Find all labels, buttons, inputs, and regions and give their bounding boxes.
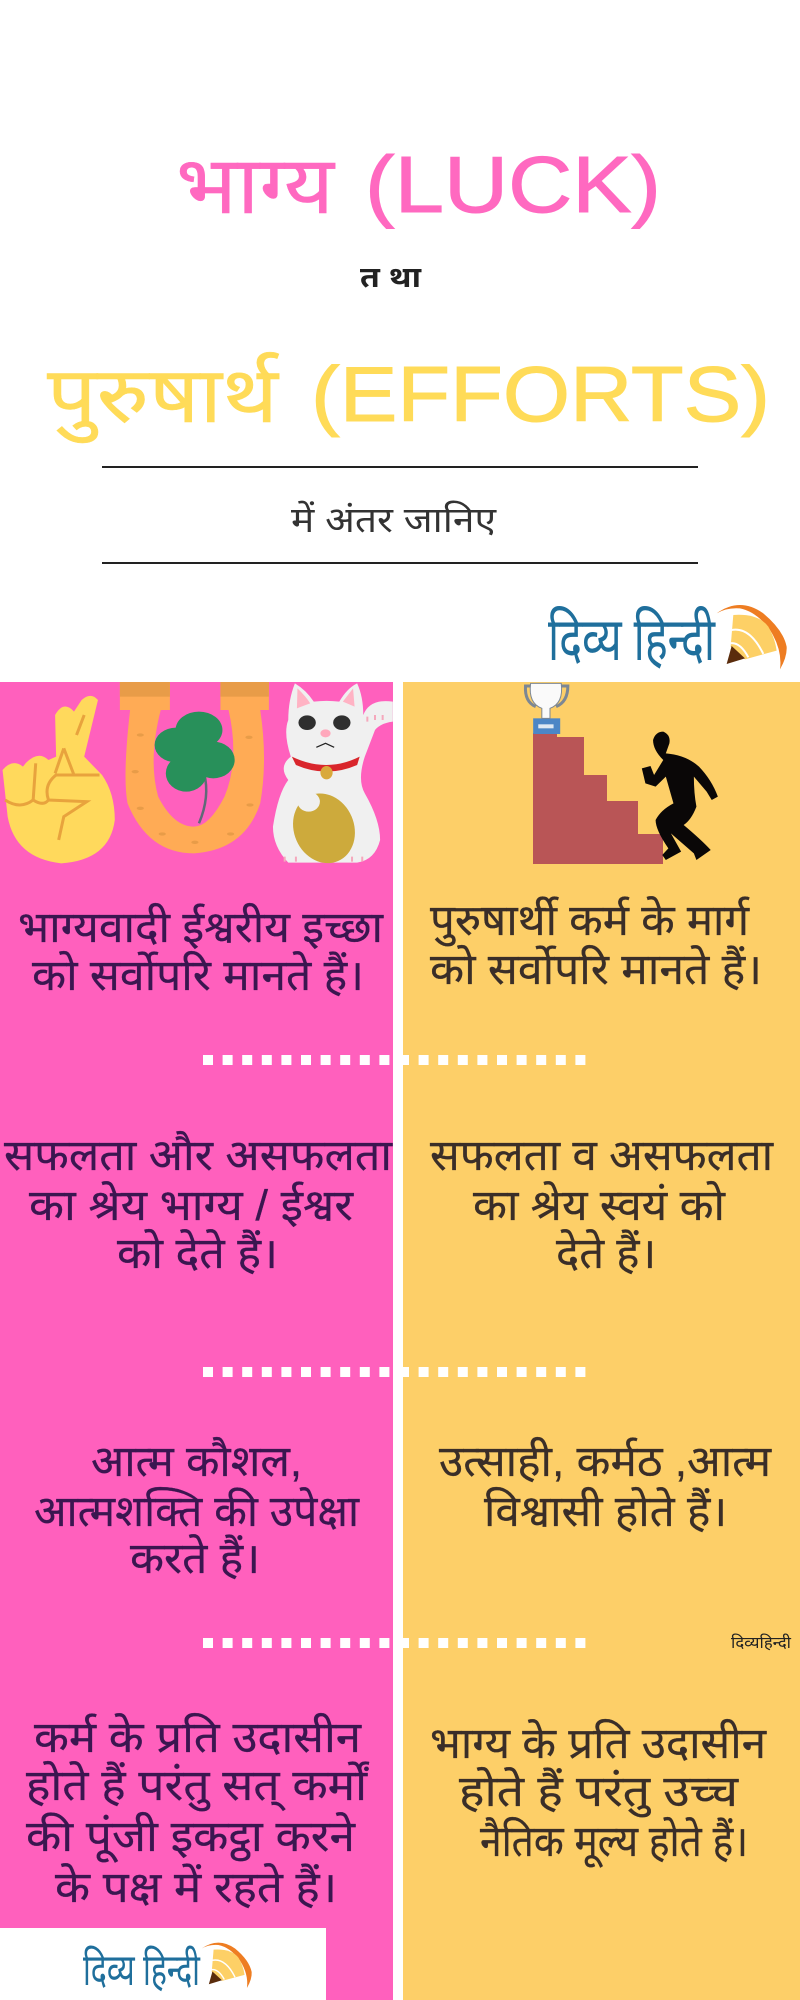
- text: left column: आत्म कौशल,: [91, 1437, 302, 1486]
- icon: crossed fingers: [3, 696, 115, 863]
- text: right column: पुरुषार्थी कर्म के मार्ग: [430, 895, 750, 947]
- panel: efforts: [403, 682, 800, 2000]
- text: right column: देते हैं।: [556, 1228, 656, 1278]
- text: left column: भाग्यवादी ईश्वरीय इच्छा: [18, 903, 384, 952]
- text: right column: [430, 895, 774, 1868]
- panel: luck: [0, 682, 393, 2000]
- text: left column: कर्म के प्रति उदासीन: [34, 1712, 362, 1762]
- title: efforts: (EFFORTS): [311, 350, 770, 438]
- text: left column: का श्रेय भाग्य / ईश्वर: [29, 1180, 354, 1230]
- icon: trophy: [525, 683, 568, 734]
- text: left column: के पक्ष में रहते हैं।: [55, 1862, 337, 1912]
- title: luck: भाग्य: [176, 141, 336, 230]
- text: right column: विश्वासी होते हैं।: [484, 1486, 727, 1536]
- title: luck: (LUCK): [365, 140, 661, 229]
- conjunction text: त था: [360, 262, 422, 294]
- text: right column: उत्साही, कर्मठ ,आत्म: [439, 1437, 772, 1486]
- title: efforts: [47, 350, 770, 443]
- icon: four leaf clover: [155, 712, 235, 823]
- title: efforts: पुरुषार्थ: [47, 351, 279, 443]
- subtitle with rules: में अंतर जानिए: [291, 500, 497, 540]
- logo: bottom: दिव्य हिन्दी: [83, 1945, 201, 1995]
- icon: staircase: [533, 733, 663, 864]
- text: right column: होते हैं परंतु उच्च: [459, 1766, 739, 1818]
- text: right column: सफलता व असफलता: [430, 1132, 774, 1180]
- small watermark text: दिव्यहिन्दी: [731, 1634, 792, 1652]
- text: left column: होते हैं परंतु सत् कर्मों: [26, 1760, 370, 1812]
- text: left column: को सर्वोपरि मानते हैं।: [32, 950, 364, 1000]
- text: left column: करते हैं।: [130, 1533, 260, 1583]
- logo: bottom: [0, 1928, 326, 2000]
- text: left column: आत्मशक्ति की उपेक्षा: [34, 1486, 360, 1536]
- icon: running man silhouette: [642, 732, 718, 860]
- text: left column: को देते हैं।: [117, 1228, 278, 1278]
- text: right column: भाग्य के प्रति उदासीन: [430, 1718, 767, 1768]
- text: right column: को सर्वोपरि मानते हैं।: [430, 944, 762, 994]
- text: left column: की पूंजी इकट्ठा करने: [26, 1811, 356, 1863]
- dotted dividers: [203, 1060, 587, 1643]
- logo: top: दिव्य हिन्दी: [548, 606, 716, 673]
- text: left column: [4, 903, 393, 1912]
- title: luck: [176, 140, 661, 230]
- icon: horseshoe: [120, 682, 269, 853]
- text: left column: सफलता और असफलता: [4, 1131, 393, 1180]
- text: right column: का श्रेय स्वयं को: [473, 1180, 726, 1230]
- icon: lucky cat: [273, 683, 393, 865]
- text: right column: नैतिक मूल्य होते हैं।: [480, 1816, 748, 1868]
